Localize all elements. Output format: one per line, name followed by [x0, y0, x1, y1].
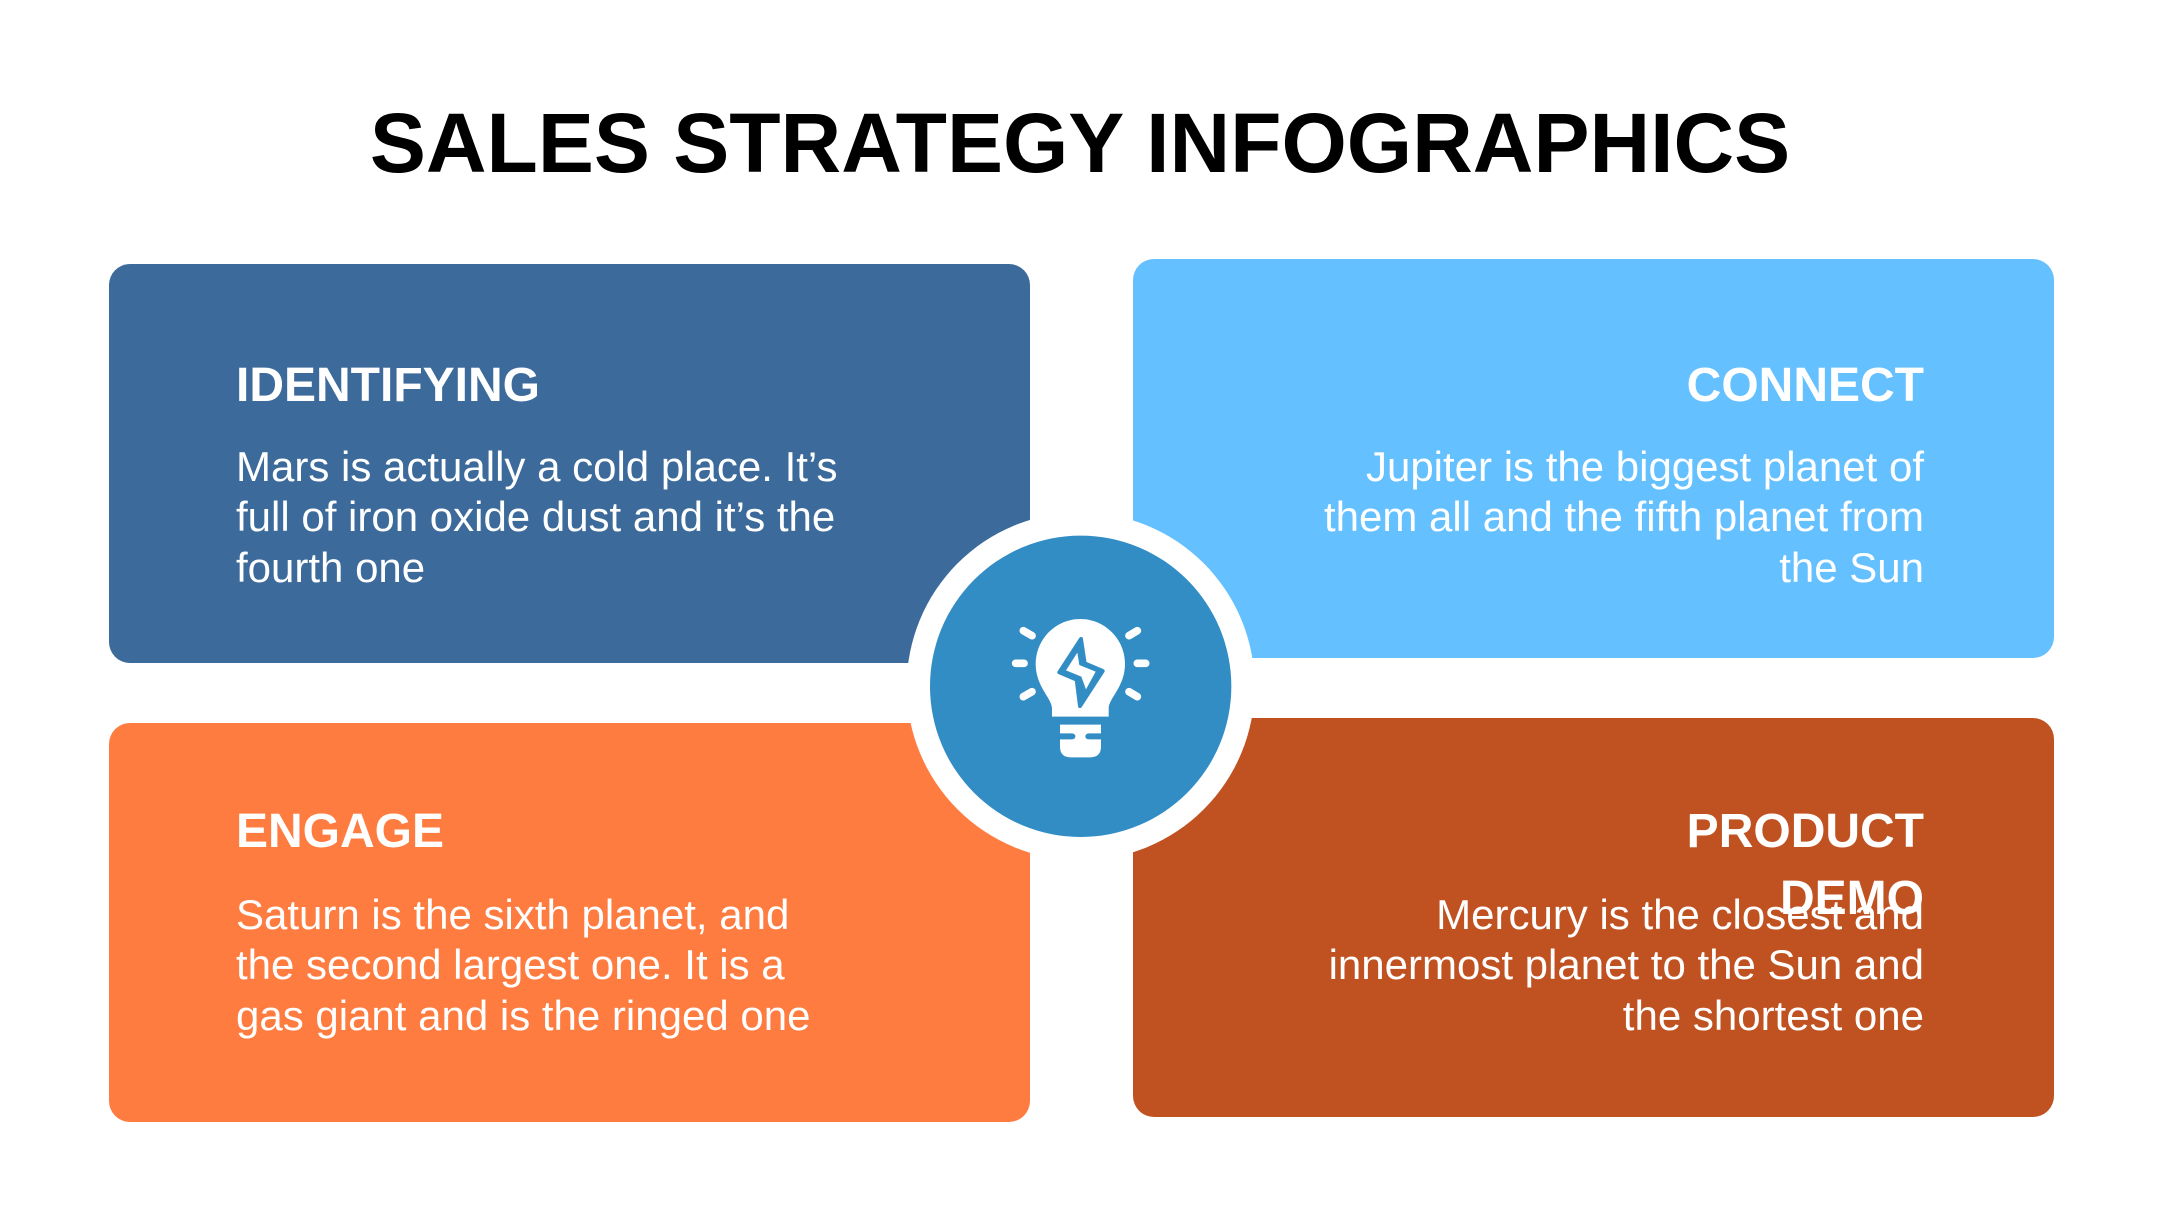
- text: connect description: the Sun: [1779, 544, 1924, 591]
- panel: product demo: [1133, 718, 2054, 1117]
- text: identifying description: Mars is actually a cold place. It’s: [236, 443, 837, 490]
- heading: connect: CONNECT: [1687, 359, 1924, 412]
- title: SALES STRATEGY INFOGRAPHICS: [370, 96, 1790, 190]
- text: connect description: [1324, 443, 1924, 591]
- heading: engage: ENGAGE: [236, 805, 444, 858]
- heading: product demo: PRODUCT: [1687, 805, 1924, 858]
- text: product demo description: the shortest one: [1623, 992, 1924, 1039]
- heading: product demo: [1687, 805, 1924, 925]
- text: product demo description: [1329, 891, 1924, 1039]
- heading: identifying: IDENTIFYING: [236, 359, 540, 412]
- white ring: [907, 512, 1255, 860]
- panel: connect: [1133, 259, 2054, 658]
- text: connect description: them all and the fifth planet from: [1324, 493, 1924, 540]
- text: engage description: [236, 891, 810, 1039]
- text: connect description: Jupiter is the biggest planet of: [1366, 443, 1924, 490]
- text: identifying description: full of iron oxide dust and it’s the: [236, 493, 835, 540]
- text: identifying description: [236, 443, 837, 591]
- blue circle: [930, 536, 1231, 837]
- icon: light bulb: [1016, 619, 1146, 757]
- text: engage description: the second largest one. It is a: [236, 941, 785, 988]
- panel: identifying: [109, 264, 1030, 663]
- text: product demo description: Mercury is the closest and: [1436, 891, 1924, 938]
- text: engage description: Saturn is the sixth planet, and: [236, 891, 789, 938]
- central badge: [908, 520, 1252, 853]
- text: product demo description: innermost planet to the Sun and: [1329, 941, 1924, 988]
- text: engage description: gas giant and is the ringed one: [236, 992, 810, 1039]
- heading: product demo: DEMO: [1780, 872, 1924, 925]
- text: identifying description: fourth one: [236, 544, 425, 591]
- panel: engage: [109, 723, 1030, 1122]
